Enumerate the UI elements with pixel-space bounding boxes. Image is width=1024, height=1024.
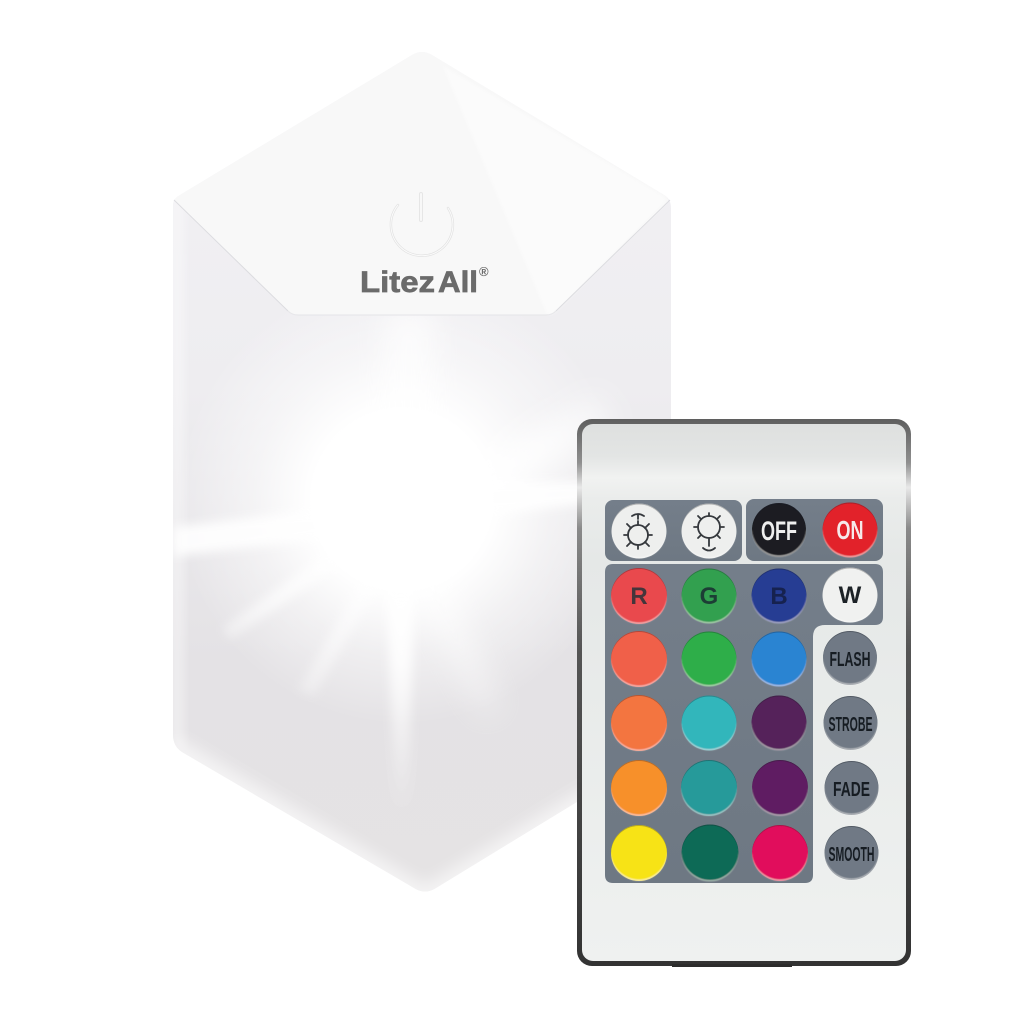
button panels <box>605 499 883 883</box>
on button <box>822 502 878 558</box>
red button <box>611 568 667 624</box>
remote face <box>582 424 906 961</box>
colour buttons <box>611 568 878 882</box>
off button: OFF <box>761 516 797 546</box>
colour swatch grid <box>611 631 808 882</box>
icon: brightness up button <box>612 504 666 558</box>
flash button: FLASH <box>830 649 870 671</box>
fade button <box>824 761 878 815</box>
registered mark: ® <box>479 264 489 279</box>
remote casing <box>577 419 911 966</box>
wall light <box>170 45 675 915</box>
brightness and power buttons <box>612 502 878 558</box>
white button <box>822 568 878 622</box>
logo: All <box>438 266 478 299</box>
blue button: B <box>770 583 788 610</box>
light rays <box>173 310 620 830</box>
blue button <box>752 568 806 624</box>
off button <box>752 503 806 557</box>
strobe button <box>824 696 878 750</box>
strobe button: STROBE <box>828 714 872 736</box>
icon: embossed power button <box>391 194 453 256</box>
logo: Litez <box>360 266 435 299</box>
logo <box>360 266 478 299</box>
green button <box>682 568 736 624</box>
fade button: FADE <box>833 779 870 801</box>
flash button <box>823 631 877 685</box>
white button: W <box>839 582 862 609</box>
mode buttons <box>823 631 878 880</box>
icon: brightness down button <box>682 504 736 558</box>
on button: ON <box>836 515 864 545</box>
smooth button: SMOOTH <box>828 844 874 866</box>
green button: G <box>700 583 718 610</box>
smooth button <box>824 826 878 880</box>
lamp body with glow <box>173 198 671 892</box>
red button: R <box>630 583 648 610</box>
remote control <box>577 419 911 967</box>
top facet <box>174 52 670 315</box>
